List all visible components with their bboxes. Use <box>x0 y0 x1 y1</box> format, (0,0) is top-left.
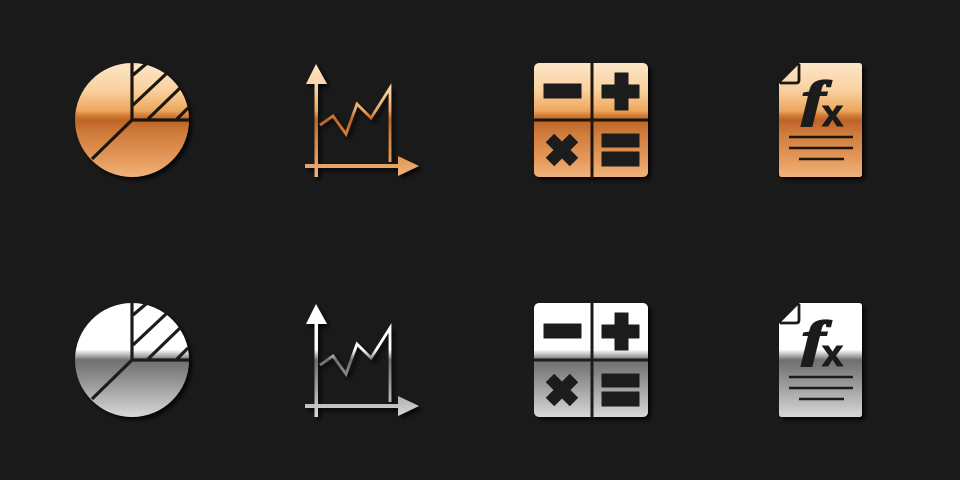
icon: silver calculator <box>534 303 648 417</box>
icon: silver formula document <box>779 303 862 417</box>
icon: gold line chart <box>305 64 419 177</box>
icon: gold formula document: x <box>822 93 843 135</box>
icon: silver line chart <box>305 304 419 417</box>
icon: silver pie chart <box>75 303 189 417</box>
icon: gold formula document: f <box>802 72 832 127</box>
icon: silver formula document: f <box>802 312 832 367</box>
icon: gold formula document <box>779 63 862 177</box>
icon: gold calculator <box>534 63 648 177</box>
icon: silver formula document: x <box>822 333 843 375</box>
icon: gold pie chart <box>75 63 189 177</box>
